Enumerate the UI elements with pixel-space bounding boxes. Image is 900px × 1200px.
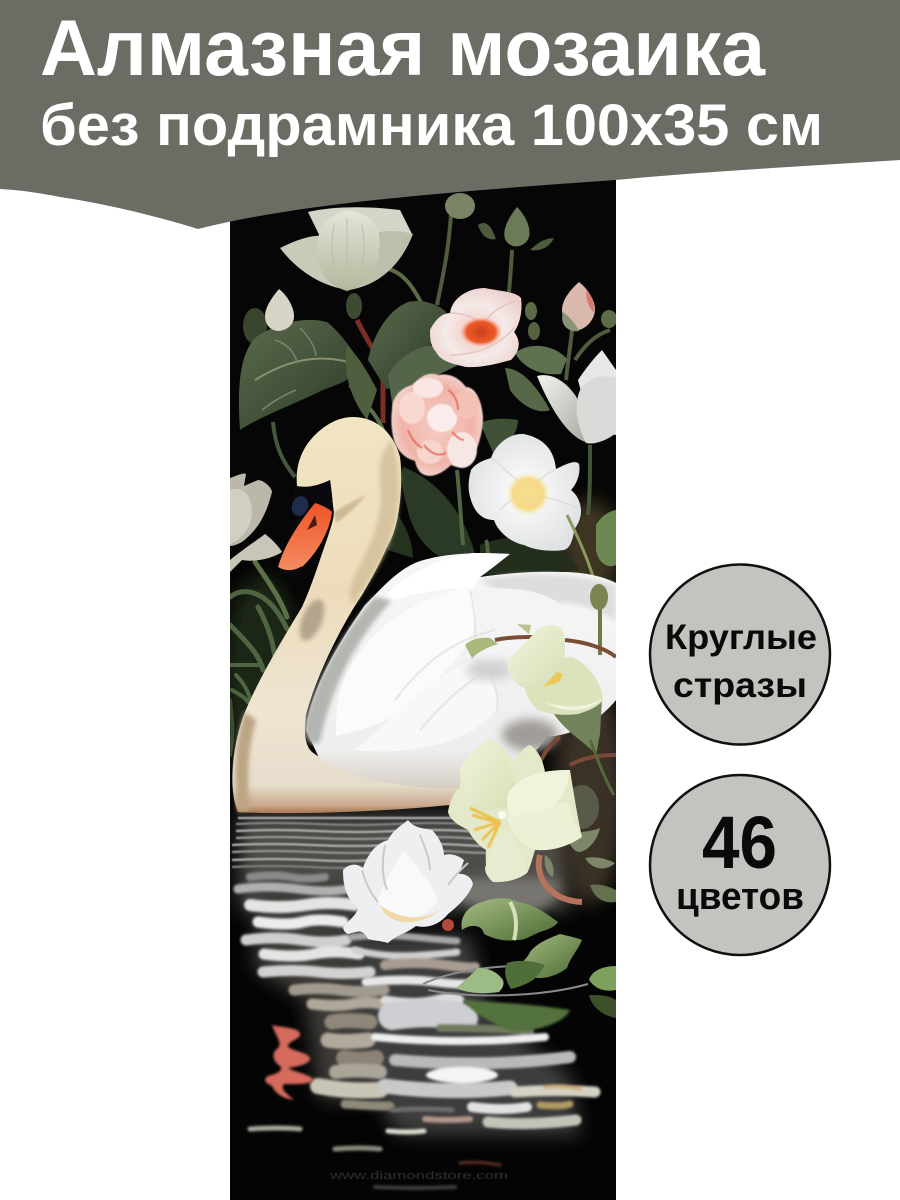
grey shadow between neck and wing <box>304 597 392 744</box>
rear back shading <box>480 575 616 620</box>
swan beak <box>278 503 332 572</box>
badge: 46 colours <box>650 775 830 955</box>
grey haze under the swan <box>240 815 570 910</box>
cheek shadow <box>334 495 366 523</box>
background foliage <box>224 467 624 905</box>
red reflection <box>265 1025 314 1100</box>
neck right tan shading <box>350 440 399 603</box>
water surface background <box>230 812 616 1200</box>
flower silhouette <box>448 738 582 882</box>
white water lily <box>343 820 473 943</box>
band behind lily <box>460 877 560 912</box>
water <box>230 812 616 1200</box>
back feather <box>492 588 560 606</box>
title line 2: без подрамника 100х35 см <box>40 93 823 158</box>
reflection haze centre <box>360 935 580 1135</box>
cream flower upper <box>507 624 603 715</box>
swan beak black mask <box>292 480 333 527</box>
dark shadow lower right <box>502 719 558 751</box>
large wing feather <box>336 641 468 736</box>
badge circle <box>650 564 830 744</box>
white flower with yellow center <box>469 434 581 551</box>
swan <box>232 417 616 813</box>
central and right reflections <box>352 936 595 1188</box>
upper feather <box>385 553 510 601</box>
white reflection bands left column <box>238 876 424 1149</box>
ring ripple around pads <box>423 966 588 995</box>
badge text: Круглые <box>665 618 817 657</box>
upper thin ripples <box>231 816 486 870</box>
title line 1: Алмазная мозаика <box>40 3 766 92</box>
left tulip <box>230 473 282 572</box>
swan neck and head <box>232 417 470 813</box>
stems <box>273 215 610 570</box>
small green buds <box>243 193 617 344</box>
white tulip right <box>537 350 616 444</box>
neck shadow patch <box>294 596 330 644</box>
center green leaves <box>346 301 567 455</box>
grey wavy header shape <box>0 0 900 229</box>
cream flower lower <box>448 738 582 882</box>
white bud left <box>265 289 294 331</box>
blue knob <box>289 494 311 518</box>
reflection haze left column <box>255 880 385 1100</box>
badge: round rhinestones <box>650 564 830 744</box>
lower wing feather <box>356 707 496 752</box>
watermark text: www.diamondstore.com <box>328 1170 508 1182</box>
pink peony <box>391 374 483 476</box>
slim green stem over swan <box>566 514 594 576</box>
number of colours: 46 <box>702 801 777 884</box>
green lily pads <box>456 898 616 1032</box>
colours label: цветов <box>676 876 804 918</box>
swan body <box>306 553 616 805</box>
large green leaf left <box>239 320 363 430</box>
top white tulip <box>280 207 413 291</box>
red stem <box>357 320 383 423</box>
header banner <box>0 0 900 229</box>
painting: swan with flowers on dark background <box>224 180 624 1200</box>
badge circle <box>650 775 830 955</box>
badge: round rhinestones: стразы <box>673 666 807 705</box>
lower neck left tan edge <box>235 712 256 812</box>
right side stems and leaves <box>465 584 616 902</box>
pink white poppy <box>430 288 522 367</box>
pink bud right <box>562 282 595 331</box>
dark painting background <box>230 180 616 812</box>
